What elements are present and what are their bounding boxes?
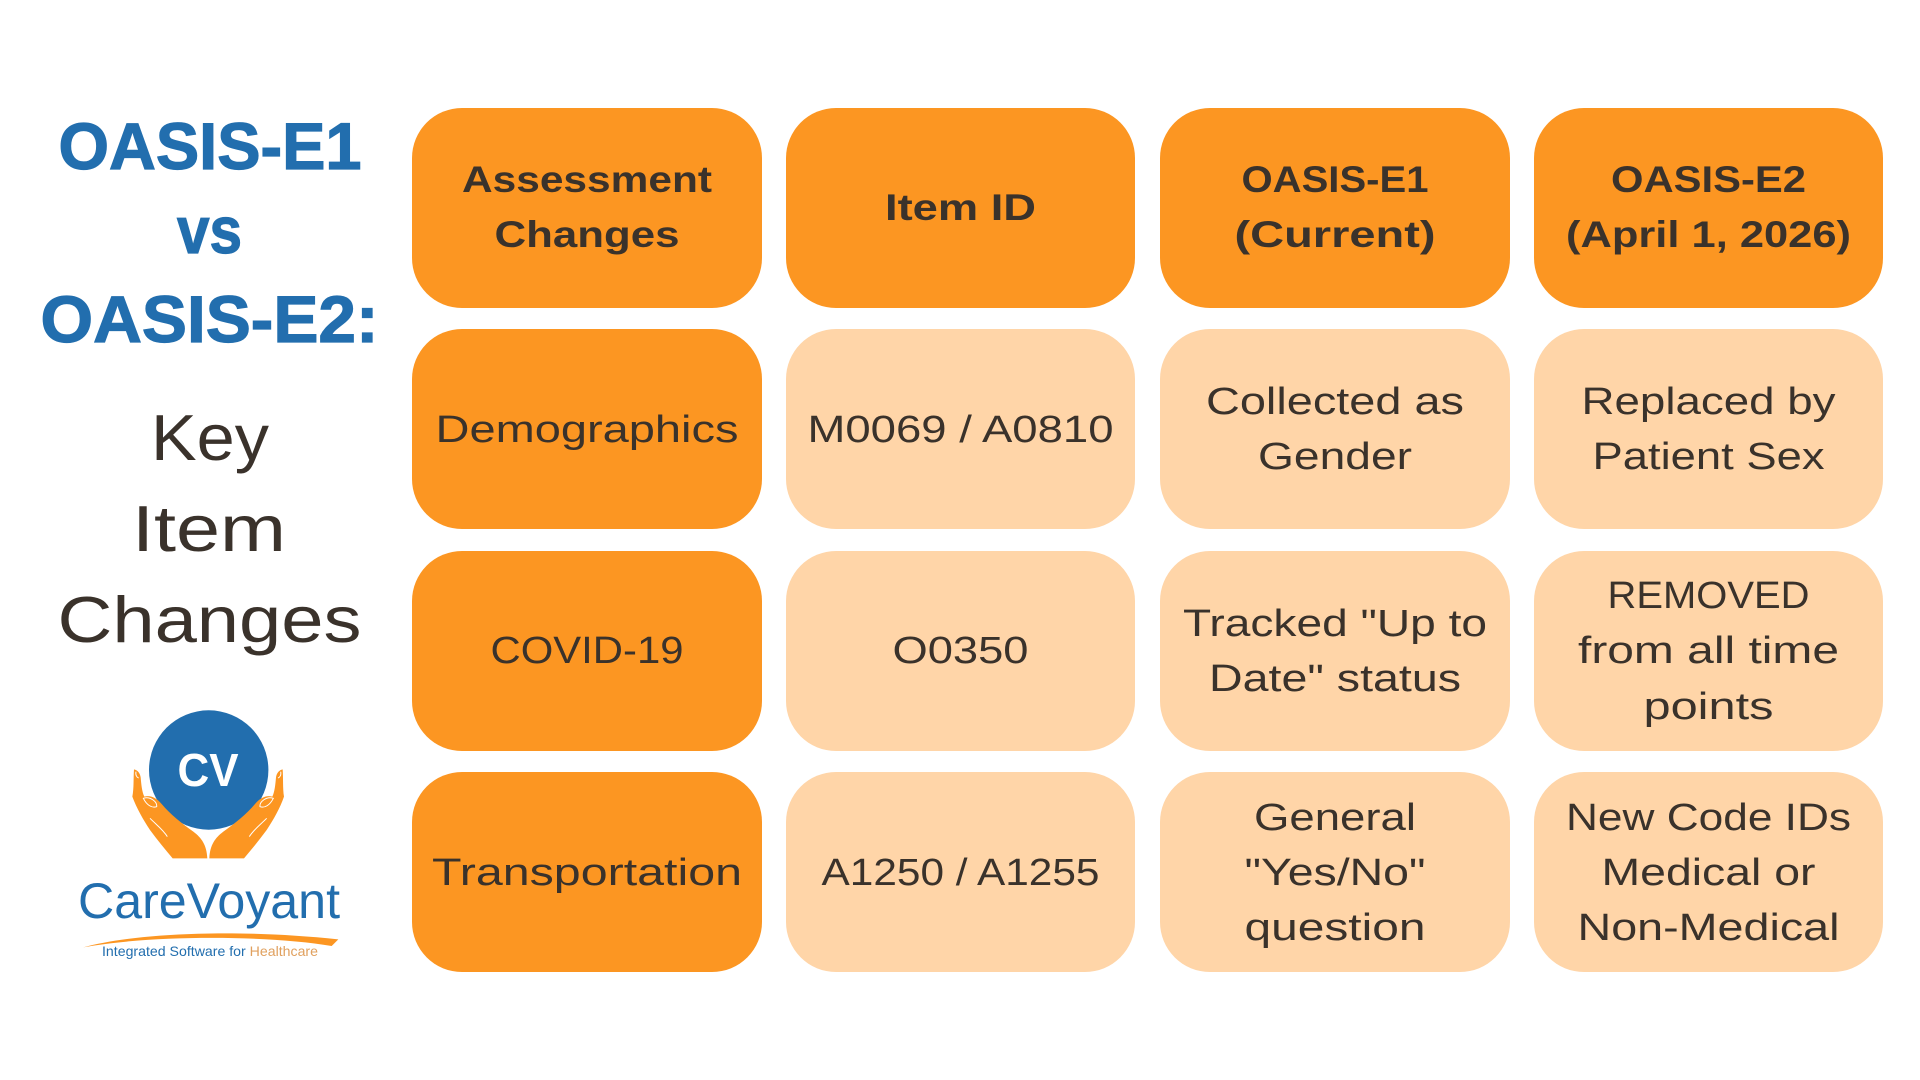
subtitle: Changes: Changes: [58, 583, 362, 656]
cell: COVID-19: [412, 551, 762, 751]
subtitle: Item: Item: [132, 492, 286, 565]
cell: M0069 / A0810: [786, 329, 1135, 529]
header cell: OASIS-E2 April 1, 2026: OASIS-E2: [1611, 159, 1806, 200]
row: Demographics: [412, 329, 1883, 529]
logo swoosh: [83, 933, 338, 947]
icon: blue circle with CV: CV: [178, 744, 239, 796]
header cell: OASIS-E1 Current: (Current): [1234, 214, 1436, 255]
row: COVID-19: [412, 551, 1883, 751]
cell: REMOVED from all time points: [1534, 551, 1883, 751]
cell: General Yes/No question: General: [1254, 797, 1416, 839]
cell: Replaced by Patient Sex: Replaced by: [1582, 381, 1836, 423]
title: [40, 109, 379, 656]
cell: General Yes/No question: question: [1244, 907, 1426, 949]
heading: vs: vs: [177, 193, 242, 267]
icon: blue circle with CV: [149, 710, 268, 830]
header cell: OASIS-E1 Current: OASIS-E1: [1242, 159, 1428, 200]
header cell: OASIS-E2 April 1, 2026: [1534, 108, 1883, 308]
cell: REMOVED from all time points: points: [1644, 686, 1774, 728]
cell: New Code IDs Medical or Non-Medical: New Code IDs: [1566, 797, 1851, 839]
cell: Transportation: [412, 772, 762, 972]
cell: Transportation: Transportation: [432, 852, 742, 894]
cell: O0350: [786, 551, 1135, 751]
logo: CareVoyant: [78, 710, 340, 959]
cell: General Yes/No question: [1160, 772, 1510, 972]
heading: OASIS-E2: OASIS-E2:: [40, 282, 379, 356]
subtitle: Key: Key: [151, 401, 270, 474]
row: Transportation: [412, 772, 1883, 972]
cell: REMOVED from all time points: from all time: [1578, 630, 1839, 672]
cell: Demographics: [412, 329, 762, 529]
header cell: Assessment Changes: Assessment: [462, 159, 712, 200]
cell: Demographics: Demographics: [436, 409, 738, 451]
icon: hands holding circle: [132, 769, 284, 858]
logo tagline: Integrated Software for Healthcare: [102, 943, 318, 959]
header cell: Assessment Changes: Changes: [494, 214, 680, 255]
header cell: OASIS-E1 Current: [1160, 108, 1510, 308]
cell: COVID-19: COVID-19: [490, 630, 684, 672]
cell: Tracked Up to Date status: Tracked "Up to: [1183, 603, 1487, 645]
cell: Collected as Gender: Collected as: [1206, 381, 1464, 423]
cell: Replaced by Patient Sex: [1534, 329, 1883, 529]
cell: Tracked Up to Date status: Date" status: [1209, 658, 1461, 700]
header cell: Assessment Changes: [412, 108, 762, 308]
cell: New Code IDs Medical or Non-Medical: Non-Medical: [1578, 907, 1840, 949]
header cell: Item ID: Item ID: [885, 187, 1036, 228]
cell: M0069 / A0810: M0069 / A0810: [808, 409, 1114, 451]
table: [412, 108, 1883, 972]
header row: [412, 108, 1883, 308]
header cell: Item ID: [786, 108, 1135, 308]
cell: Collected as Gender: [1160, 329, 1510, 529]
cell: Replaced by Patient Sex: Patient Sex: [1592, 436, 1824, 478]
cell: A1250 / A1255: [786, 772, 1135, 972]
cell: A1250 / A1255: A1250 / A1255: [822, 852, 1100, 894]
cell: General Yes/No question: "Yes/No": [1244, 852, 1426, 894]
cell: O0350: O0350: [892, 630, 1028, 672]
cell: New Code IDs Medical or Non-Medical: Medical or: [1602, 852, 1816, 894]
cell: New Code IDs Medical or Non-Medical: [1534, 772, 1883, 972]
cell: REMOVED from all time points: REMOVED: [1608, 575, 1810, 617]
heading: OASIS-E1: OASIS-E1: [58, 109, 362, 183]
logo wordmark: CareVoyant: [78, 873, 340, 929]
cell: Tracked Up to Date status: [1160, 551, 1510, 751]
cell: Collected as Gender: Gender: [1258, 436, 1412, 478]
header cell: OASIS-E2 April 1, 2026: (April 1, 2026): [1566, 214, 1851, 255]
